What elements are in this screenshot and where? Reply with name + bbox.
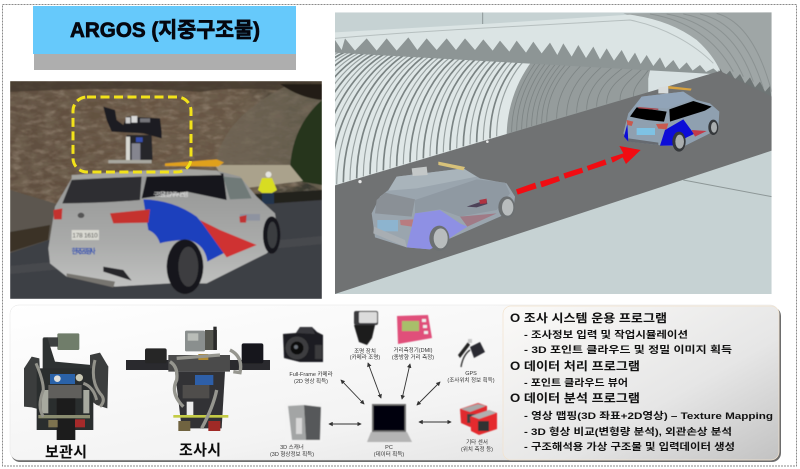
text block: software programs	[510, 312, 773, 453]
label: PC: PC	[385, 445, 393, 451]
dark middle section	[506, 64, 650, 134]
panel: equipment and software overview	[10, 305, 781, 462]
label: 3D scanner	[270, 443, 314, 458]
near vehicle model	[372, 162, 515, 251]
photo: survey vehicle in tunnel	[10, 81, 322, 299]
label: PC	[374, 445, 404, 458]
label: flash: (카메라 조명)	[350, 353, 380, 361]
icon: full-frame camera	[283, 327, 323, 362]
icon: laptop PC	[367, 404, 412, 442]
icon: GPS receiver	[458, 339, 485, 367]
arrows to PC	[329, 363, 451, 424]
title banner	[33, 6, 296, 70]
vehicle	[48, 159, 280, 294]
tunnel top band and teeth	[335, 15, 720, 74]
icon: flash	[354, 311, 378, 345]
label: 3D scanner: 3D 스캐너	[280, 443, 304, 451]
label: other sensors: 기타 센서	[466, 438, 488, 446]
far tunnel section	[623, 12, 772, 100]
label: 3D scanner: (3D 형상정보 획득)	[270, 450, 314, 458]
text block: software programs: O 조사 시스템 운용 프로그램	[510, 312, 667, 325]
panel: 3D tunnel simulation	[335, 12, 772, 294]
label: other sensors: (위치 측정 등)	[461, 445, 493, 453]
label: PC: (데이터 획득)	[374, 450, 404, 458]
label: DMI: (종방향 거리 측정)	[392, 353, 434, 361]
label: other sensors	[461, 438, 493, 453]
yellow dashed highlight box	[73, 97, 191, 172]
title text: ARGOS (지중구조물)	[70, 19, 260, 42]
roof light bar	[165, 159, 224, 167]
label: camera: Full-Frame 카메라	[289, 370, 333, 378]
label: DMI	[392, 346, 434, 361]
label: camera: (2D 영상 획득)	[294, 377, 328, 385]
equipment: storage mode	[24, 333, 108, 440]
text block: software programs: O 데이터 분석 프로그램	[510, 391, 640, 405]
vehicle: 구조물 정밀 계측시스템	[153, 191, 188, 199]
icon: other red sensors	[460, 403, 497, 435]
road	[335, 71, 772, 294]
label: camera	[289, 370, 333, 385]
label: DMI: 거리측정기(DMI)	[393, 346, 433, 354]
label: flash: 조명 장치	[354, 347, 376, 355]
text block: software programs: - 3D 형상 비교(변형량 분석), 외관손상 분석	[524, 426, 732, 438]
light opening	[648, 68, 718, 92]
label: GPS	[447, 371, 495, 384]
near tunnel ribbed section	[335, 52, 530, 186]
icon: DMI distance meter	[397, 315, 432, 344]
text block: software programs: - 3D 포인트 클라우드 및 정밀 이미지 획득	[524, 344, 732, 356]
vehicle: 178 1610	[72, 232, 98, 239]
red dashed arrow	[516, 146, 641, 195]
text block: software programs: - 조사정보 입력 및 작업시뮬레이션	[524, 329, 688, 341]
label: storage mode: 보관시	[45, 444, 87, 461]
label: GPS: GPS	[465, 371, 477, 377]
roof scanner equipment	[103, 107, 162, 163]
text block: software programs: - 구조해석용 가상 구조물 및 입력데이터 생성	[524, 441, 735, 453]
far vehicle model	[623, 86, 719, 152]
label: survey mode: 조사시	[179, 442, 221, 459]
text block: software programs: - 포인트 클라우드 뷰어	[524, 378, 628, 389]
label: GPS: (조사위치 정보 획득)	[447, 376, 495, 384]
text block: software programs: - 영상 맵핑(3D 좌표+2D영상) – Texture Mapping	[524, 410, 773, 422]
icon: 3D scanner	[285, 403, 322, 442]
worker	[258, 172, 277, 204]
vehicle: 한국도로공사	[72, 246, 96, 255]
label: flash	[350, 347, 380, 361]
equipment: survey mode	[126, 327, 270, 431]
text block: software programs: O 데이터 처리 프로그램	[510, 359, 640, 373]
